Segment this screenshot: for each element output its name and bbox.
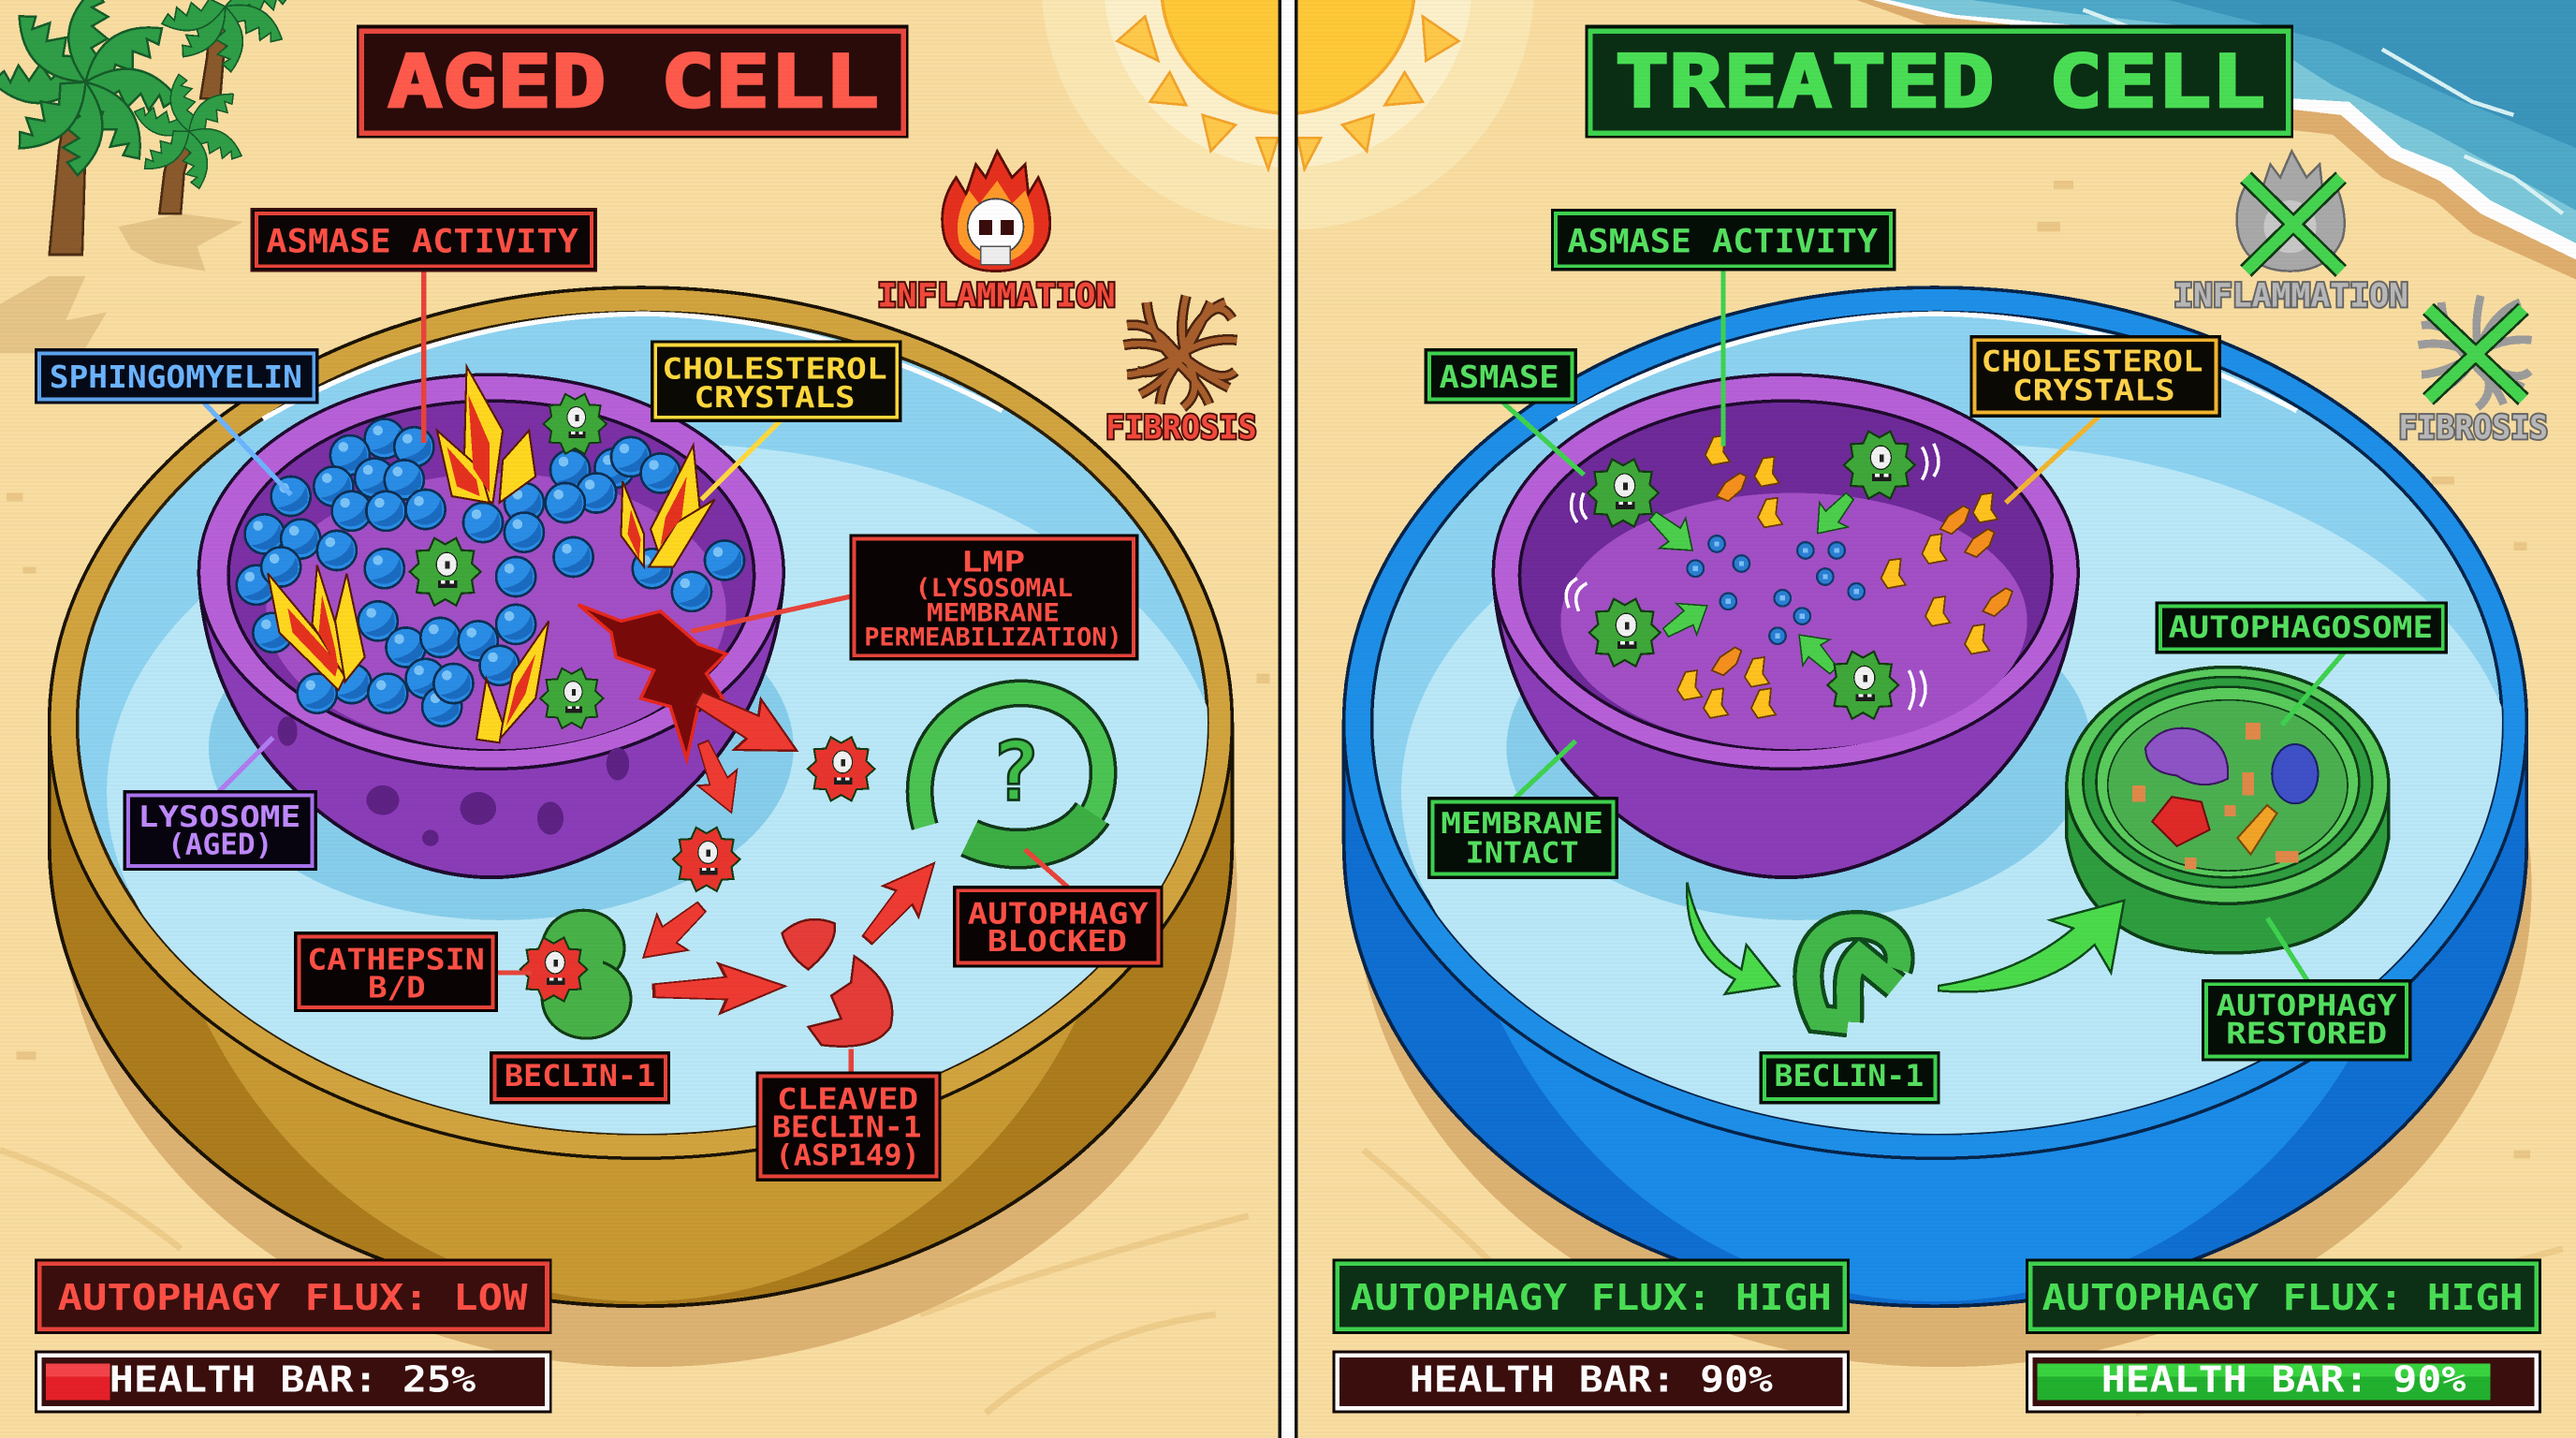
label: fibrosis: FIBROSIS [1105, 409, 1257, 448]
title: aged cell [357, 24, 909, 138]
health bar 25%: HEALTH BAR: 25% [110, 1359, 476, 1401]
label: cathepsin [294, 932, 498, 1012]
icon: fibrosis tangle [1123, 296, 1237, 407]
cleaved beclin fragments [782, 919, 892, 1047]
membrane crack [578, 605, 726, 759]
label: cholesterol crystals aged [651, 340, 902, 422]
label: cleaved beclin: BECLIN-1 [772, 1110, 922, 1144]
cholesterol crystals [268, 366, 714, 742]
label: asmase [1425, 348, 1577, 404]
label: asmase activity [252, 209, 596, 271]
autophagosome blocked ring [920, 693, 1104, 849]
label: beclin-1 treated [1760, 1051, 1940, 1104]
arrow: lysosome to beclin [1687, 882, 1779, 994]
leader lines aged [205, 271, 1068, 1071]
label: autophagy restored: AUTOPHAGY [2217, 990, 2397, 1023]
health bar 90% filled: HEALTH BAR: 90% [2101, 1359, 2466, 1401]
stat: autophagy flux low: AUTOPHAGY FLUX: LOW [57, 1277, 528, 1319]
cathepsin enzymes [673, 737, 874, 891]
health bar 90% empty [1332, 1351, 1850, 1413]
label: cholesterol crystals treated: CHOLESTEROL [1982, 345, 2203, 379]
label: LMP: MEMBRANE [927, 599, 1060, 627]
leader lines treated [1505, 271, 2343, 979]
small sphingomyelin dots [1687, 536, 1865, 644]
autophagosome blocked ring: ? [990, 725, 1040, 820]
asmase enzymes [410, 394, 607, 728]
petri dish: treated blue [1344, 243, 2532, 1367]
beclin-1 intact [1808, 926, 1899, 1022]
green arrows in bowl [1640, 484, 1864, 683]
label: membrane intact: MEMBRANE [1441, 807, 1603, 841]
label: inflammation: INFLAMMATION [877, 276, 1116, 315]
health bar 90% empty: HEALTH BAR: 90% [1410, 1359, 1773, 1401]
label: asmase activity treated [1551, 209, 1895, 271]
label: cholesterol crystals aged: CHOLESTEROL [662, 353, 887, 387]
label: lysosome aged [124, 790, 317, 871]
label: cholesterol crystals treated: CRYSTALS [2012, 374, 2175, 407]
label: cleaved beclin [755, 1071, 942, 1181]
icon: inflammation crossed out [2237, 151, 2345, 271]
label: LMP: LMP [961, 547, 1025, 580]
panel: treated cell [1332, 24, 2548, 1413]
label: inflammation grey: INFLAMMATION [2174, 276, 2408, 315]
label: asmase activity: ASMASE ACTIVITY [266, 222, 578, 260]
label: membrane intact: INTACT [1466, 836, 1579, 870]
icon: inflammation skull flame [943, 151, 1050, 271]
label: beclin-1 aged: BECLIN-1 [505, 1060, 655, 1093]
label: sphingomyelin [35, 348, 319, 404]
label: sphingomyelin: SPHINGOMYELIN [50, 359, 302, 395]
label: beclin-1 aged [490, 1051, 670, 1104]
label: cathepsin: B/D [368, 971, 426, 1005]
title: treated cell: TREATED CELL [1615, 40, 2265, 125]
motion marks [1566, 444, 1939, 710]
label: autophagy restored: RESTORED [2226, 1017, 2387, 1050]
small crystal fragments [1677, 435, 2012, 718]
lysosome bowl (healthy) [1493, 374, 2078, 877]
label: autophagosome [2156, 601, 2448, 654]
title: aged cell: AGED CELL [388, 40, 879, 125]
title: treated cell [1586, 24, 2293, 138]
stat: autophagy flux low [35, 1258, 552, 1334]
label: lysosome aged: LYSOSOME [138, 800, 300, 834]
label: autophagy blocked: BLOCKED [988, 925, 1127, 959]
label: cholesterol crystals aged: CRYSTALS [695, 381, 856, 415]
sea and shoreline [1856, 0, 2576, 279]
label: autophagosome: AUTOPHAGOSOME [2169, 611, 2433, 645]
label: cleaved beclin: (ASP149) [775, 1138, 920, 1172]
label: asmase: ASMASE [1439, 359, 1559, 395]
sphingomyelin spheres [237, 419, 744, 726]
leaked cathepsin arrows [628, 673, 952, 1016]
stat: autophagy flux high 2: AUTOPHAGY FLUX: HIGH [2042, 1277, 2524, 1319]
arrow: beclin to autophagosome [1939, 901, 2124, 991]
stat: autophagy flux high 1 [1332, 1258, 1850, 1334]
label: autophagy restored [2202, 979, 2411, 1062]
label: membrane intact [1427, 797, 1618, 879]
label: cathepsin: CATHEPSIN [307, 943, 485, 976]
divider between panels [1278, 0, 1298, 1438]
label: asmase activity treated: ASMASE ACTIVITY [1567, 222, 1878, 260]
sun [1117, 0, 1459, 169]
autophagosome [2067, 668, 2389, 953]
label: fibrosis grey: FIBROSIS [2398, 409, 2548, 448]
panel: aged cell [35, 24, 1257, 1413]
health bar 25% [35, 1351, 552, 1413]
label: autophagy blocked [953, 886, 1164, 968]
label: cholesterol crystals treated [1969, 335, 2221, 418]
asmase enzymes [1588, 432, 1915, 719]
label: LMP [849, 534, 1138, 661]
label: lysosome aged: (AGED) [168, 829, 272, 862]
label: LMP: (LYSOSOMAL [915, 575, 1073, 603]
label: autophagy blocked: AUTOPHAGY [968, 897, 1149, 931]
label: beclin-1 treated: BECLIN-1 [1774, 1060, 1924, 1093]
health bar 90% filled [2026, 1351, 2541, 1413]
label: LMP: PERMEABILIZATION) [864, 624, 1122, 653]
stat: autophagy flux high 1: AUTOPHAGY FLUX: HIGH [1351, 1277, 1832, 1319]
palm trees [0, 0, 289, 353]
label: cleaved beclin: CLEAVED [777, 1083, 918, 1117]
petri dish: aged gold [50, 243, 1237, 1367]
beclin-1 with cathepsin [520, 910, 631, 1038]
icon: fibrosis crossed out [2418, 296, 2532, 407]
lysosome bowl (aged) [198, 366, 783, 877]
stat: autophagy flux high 2 [2026, 1258, 2541, 1334]
